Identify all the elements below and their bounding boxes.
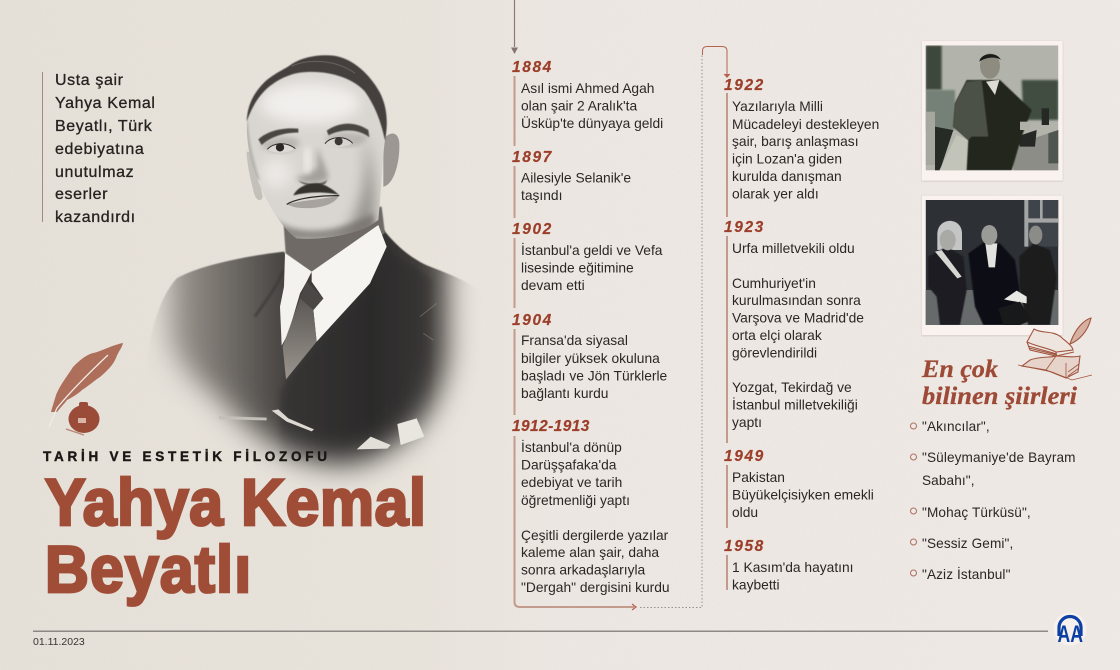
tie [283, 282, 323, 379]
entry 1923: Urfa milletvekili oldu [732, 241, 855, 256]
head [246, 54, 400, 239]
entry 1884: olan şair 2 Aralık'ta [521, 98, 637, 114]
entry 1923: 1923 [724, 219, 765, 236]
entry 1884 [512, 59, 663, 131]
shirt collar [280, 253, 312, 346]
timeline column 2 [724, 77, 879, 592]
entry 1922: Mücadeleyi destekleyen [732, 117, 879, 132]
entry 1958: 1 Kasım'da hayatını [732, 560, 854, 575]
entry 1912-1913: İstanbul'a dönüp [521, 438, 622, 455]
entry 1904: bilgiler yüksek okuluna [521, 351, 660, 366]
entry 1902: devam etti [521, 278, 585, 293]
entry 1923: Yozgat, Tekirdağ ve [732, 380, 852, 395]
entry 1923: orta elçi olarak [732, 328, 822, 343]
poem list: "Süleymaniye'de Bayram [922, 450, 1076, 465]
poem list: "Sessiz Gemi", [922, 536, 1013, 551]
eyes [267, 144, 295, 153]
intro text: Beyatlı, Türk [55, 118, 153, 135]
logo: AA: AA [1058, 621, 1083, 648]
entry 1902: İstanbul'a geldi ve Vefa [521, 241, 663, 258]
title [45, 467, 426, 607]
entry 1902: 1902 [512, 221, 553, 238]
entry 1902 [512, 221, 663, 293]
heading: best known poems: bilinen şiirleri [922, 383, 1077, 410]
photo frame 2: three men in uniform [922, 196, 1063, 335]
heading: best known poems [921, 356, 1077, 410]
poem list: Sabahı", [922, 473, 975, 488]
poem list: "Akıncılar", [922, 419, 990, 434]
entry 1922: Yazılarıyla Milli [732, 99, 823, 114]
entry 1912-1913: kaleme alan şair, daha [521, 545, 659, 560]
entry 1912-1913: Çeşitli dergilerde yazılar [521, 528, 669, 543]
entry 1923 [724, 219, 864, 430]
entry 1884: Üsküp'te dünyaya geldi [521, 114, 663, 131]
entry 1912-1913: edebiyat ve tarih [521, 475, 622, 490]
pocket square and lapel marks [219, 409, 424, 449]
entry 1897: 1897 [512, 149, 553, 166]
entry 1897: taşındı [521, 188, 562, 203]
icon: open books and feather [1018, 318, 1092, 380]
entry 1958 [724, 538, 854, 592]
entry 1897: Ailesiyle Selanik'e [521, 170, 631, 186]
intro text: unutulmaz [55, 164, 134, 181]
face [246, 72, 386, 239]
eyebrows [258, 128, 298, 145]
entry 1923: Varşova ve Madrid'de [732, 310, 864, 326]
icon: feather and inkwell [49, 343, 123, 435]
ears [383, 134, 399, 187]
subtitle: TARİH VE ESTETİK FİLOZOFU [43, 449, 327, 464]
entry 1923: kurulmasından sonra [732, 293, 861, 308]
intro text: kazandırdı [55, 209, 136, 226]
entry 1923: İstanbul milletvekiliği [732, 396, 858, 412]
photo frame 1: poet standing [922, 41, 1063, 181]
entry 1923: Cumhuriyet'in [732, 276, 816, 291]
entry 1922: 1922 [724, 77, 765, 94]
timeline column 1 [512, 59, 670, 595]
entry 1922: kurulda danışman [732, 169, 842, 184]
entry 1904 [512, 312, 668, 401]
moustache and mouth [293, 183, 339, 195]
portrait photo [152, 54, 470, 486]
poem list [910, 419, 1076, 582]
logo: AA [1054, 612, 1086, 648]
timeline connectors [511, 0, 730, 610]
neck [283, 207, 385, 272]
entry 1912-1913: öğretmenliği yaptı [521, 493, 630, 508]
entry 1958: kaybetti [732, 578, 780, 592]
entry 1922: için Lozan'a giden [732, 152, 842, 166]
date: 01.11.2023 [33, 636, 85, 648]
entry 1912-1913: 1912-1913 [512, 418, 591, 435]
entry 1949: 1949 [724, 448, 765, 465]
photos [922, 41, 1063, 335]
eye sockets [260, 137, 300, 152]
entry 1949: Pakistan [732, 470, 785, 485]
intro text: Usta şair [55, 72, 124, 89]
entry 1912-1913 [512, 418, 670, 595]
entry 1922: olarak yer aldı [732, 186, 819, 202]
entry 1904: başladı ve Jön Türklerle [521, 368, 668, 384]
jacket [152, 230, 470, 486]
intro text: Yahya Kemal [55, 95, 156, 112]
intro text: eserler [55, 186, 108, 203]
jaw and side shading [340, 133, 375, 240]
poem list: "Aziz İstanbul" [922, 567, 1011, 582]
title: Beyatlı [45, 534, 251, 607]
entry 1897 [512, 149, 631, 203]
entry 1912-1913: Darüşşafaka'da [521, 458, 617, 472]
entry 1884: 1884 [512, 59, 553, 76]
entry 1922: şair, barış anlaşması [732, 134, 859, 149]
entry 1904: Fransa'da siyasal [521, 333, 628, 348]
entry 1923: yaptı [732, 415, 762, 430]
entry 1904: bağlantı kurdu [521, 386, 608, 401]
entry 1949: oldu [732, 505, 758, 520]
entry 1949 [724, 448, 874, 520]
title: Yahya Kemal [45, 467, 426, 540]
heading: best known poems: En çok [921, 356, 999, 383]
entry 1902: lisesinde eğitimine [521, 260, 634, 276]
entry 1958: 1958 [724, 538, 765, 555]
entry 1904: 1904 [512, 312, 553, 329]
hair [247, 55, 387, 141]
intro text: edebiyatına [55, 141, 144, 158]
entry 1922 [724, 77, 879, 202]
entry 1884: Asıl ismi Ahmed Agah [521, 81, 654, 96]
forehead highlight [260, 83, 360, 123]
poem list: "Mohaç Türküsü", [922, 505, 1031, 520]
footer rule [33, 630, 1048, 632]
intro text [42, 72, 156, 226]
entry 1923: görevlendirildi [732, 346, 817, 360]
entry 1912-1913: sonra arkadaşlarıyla [521, 562, 646, 578]
nose shading [296, 147, 328, 183]
entry 1912-1913: "Dergah" dergisini kurdu [521, 580, 670, 595]
entry 1949: Büyükelçisiyken emekli [732, 488, 874, 502]
